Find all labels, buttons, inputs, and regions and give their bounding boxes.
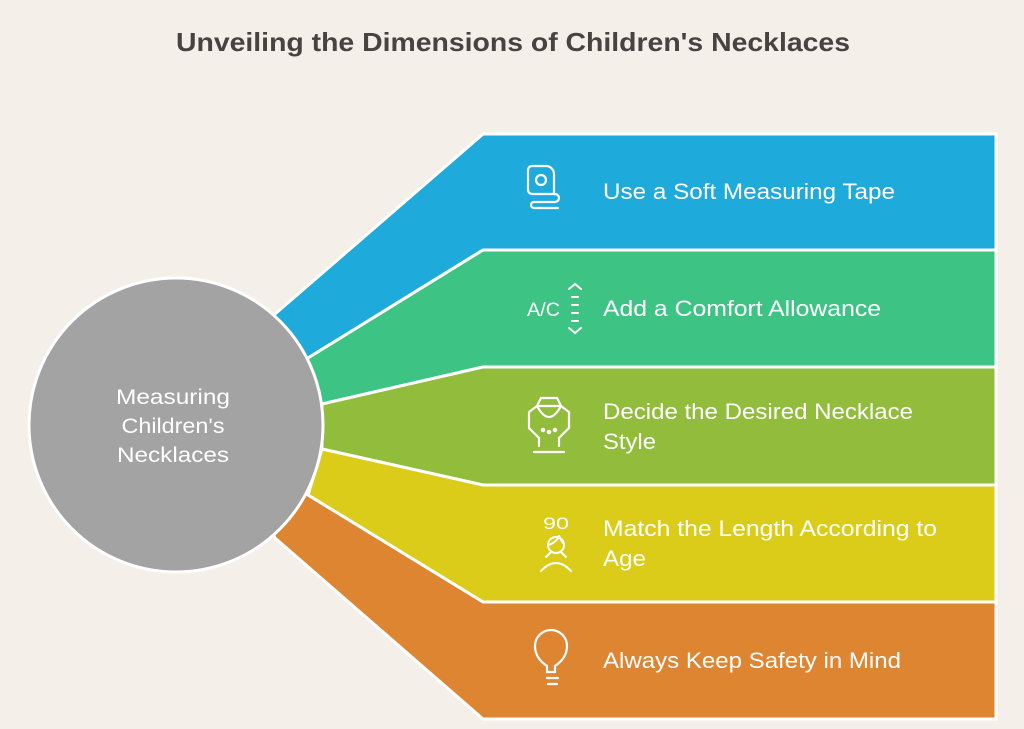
band: yellow: Age [603, 546, 646, 571]
icon: light bulb [535, 630, 567, 684]
icon: necklace bust [529, 398, 569, 452]
band: green [300, 250, 996, 410]
text: decide the desired necklace style: Decide the Desired Necklace [603, 399, 913, 424]
text: add a comfort allowance: Add a Comfort Allowance [603, 296, 881, 321]
band: orange [250, 470, 996, 719]
text: match the length according to age: Match the Length According to [603, 516, 937, 541]
center circle: Children's [122, 415, 224, 438]
title: Unveiling the Dimensions of Children's Necklaces [176, 27, 850, 57]
band: olive [322, 367, 996, 485]
center circle: Measuring [116, 386, 230, 409]
icon: measuring tape [528, 166, 559, 208]
center circle: Necklaces [117, 444, 229, 467]
text: always keep safety in mind: Always Keep Safety in Mind [603, 648, 901, 673]
text: use a soft measuring tape: Use a Soft Measuring Tape [603, 179, 895, 204]
icon: A/C allowance [527, 284, 581, 333]
band: blue [250, 134, 996, 380]
center circle [29, 278, 323, 572]
icon: child age: 90 [543, 514, 569, 533]
icon: A/C allowance: A/C [527, 300, 560, 321]
icon: child age [541, 514, 571, 571]
band: olive: Style [603, 429, 656, 454]
band: yellow [308, 449, 996, 602]
